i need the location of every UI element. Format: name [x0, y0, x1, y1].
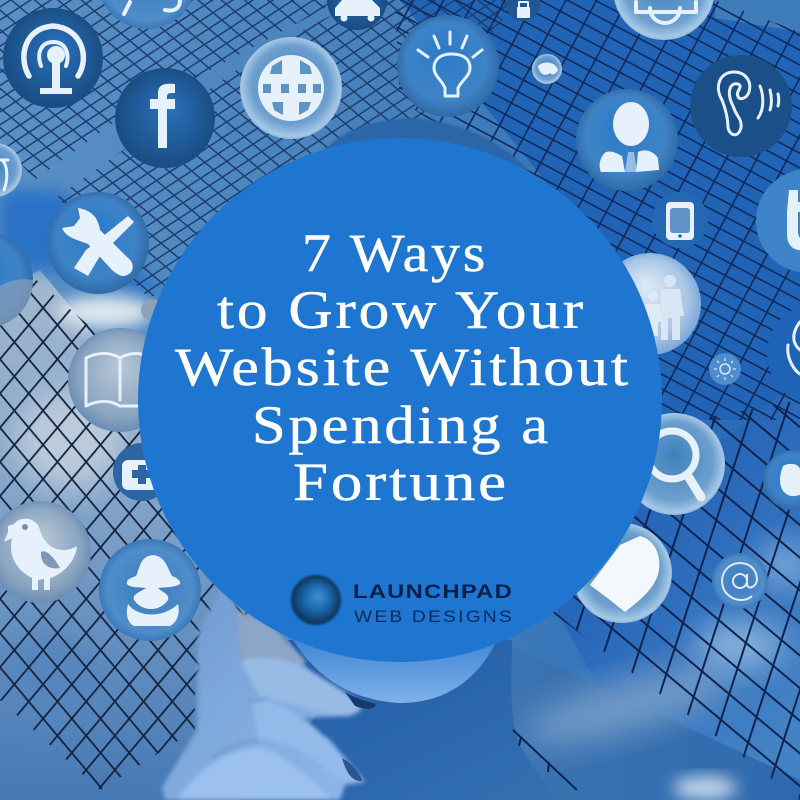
title: Fortune	[293, 452, 509, 512]
sphere: top partial	[98, 0, 196, 29]
sphere: left edge partial top	[0, 143, 22, 197]
nail: middle	[345, 692, 376, 709]
sphere: sun	[709, 353, 741, 385]
logo wordmark	[353, 581, 514, 626]
sphere: family	[599, 253, 701, 355]
logo wordmark: LAUNCHPAD	[353, 581, 513, 603]
logo sphere	[291, 575, 341, 625]
sphere: globe	[240, 37, 342, 139]
logo: Launchpad Web Designs	[291, 575, 514, 626]
hand	[162, 590, 365, 800]
title: Spending a	[252, 395, 551, 455]
nail: ring	[342, 758, 362, 781]
grid panel: upper right	[395, 0, 800, 420]
sphere: ear and sound	[690, 55, 792, 157]
title	[175, 223, 631, 512]
sphere: business person	[576, 89, 678, 191]
grid panel: upper left	[0, 0, 340, 180]
sphere: car	[327, 0, 387, 30]
finger crease	[212, 698, 268, 758]
sphere: smartphone	[652, 192, 708, 248]
finger: ring	[252, 698, 362, 782]
sphere: avatar	[99, 539, 201, 641]
sphere: right edge partial	[767, 303, 800, 405]
title: 7 Ways	[302, 223, 488, 283]
hair behind circle	[325, 118, 535, 240]
sphere: camera	[613, 0, 715, 40]
grid panel: lower right	[553, 400, 800, 800]
title: Website Without	[175, 337, 631, 397]
sphere: whale	[763, 450, 800, 510]
chin	[290, 635, 497, 703]
sphere: medical kit	[113, 443, 171, 501]
sphere: magnifier	[623, 413, 725, 515]
sphere: left edge partial lower	[0, 232, 33, 328]
phone edge shading	[237, 610, 307, 665]
neck and throat	[240, 640, 560, 800]
sphere: book	[68, 328, 172, 432]
finger: little	[178, 748, 332, 800]
sphere: tools	[47, 192, 149, 294]
main blue circle	[138, 138, 662, 662]
grid panel: lower left	[0, 277, 260, 790]
logo wordmark: WEB DESIGNS	[354, 607, 514, 626]
grid panel: upper centre	[57, 0, 520, 300]
sphere: chat bubble	[572, 523, 672, 623]
sphere: padlock	[506, 0, 540, 21]
sphere: bird	[0, 501, 91, 603]
sphere: tumblr	[756, 169, 800, 273]
grid line fragment with ticks	[513, 730, 577, 790]
sphere: broadcast icon	[3, 8, 103, 108]
sphere: light bulb	[397, 15, 499, 117]
finger: middle	[240, 658, 362, 716]
sphere: facebook	[115, 68, 215, 168]
sphere: small globe	[532, 54, 562, 84]
title: to Grow Your	[217, 280, 586, 340]
sphere: small grey	[141, 299, 163, 321]
sphere: at sign	[712, 553, 768, 609]
